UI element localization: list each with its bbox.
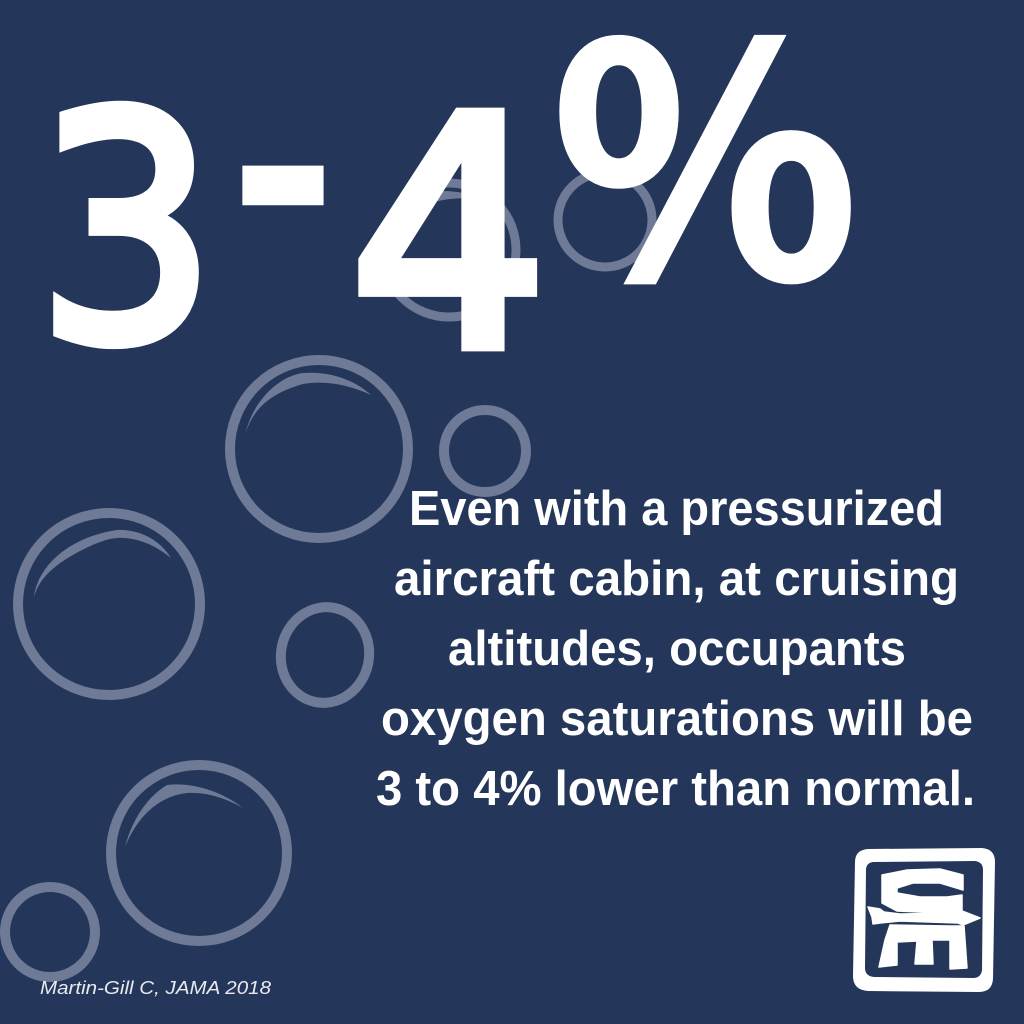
title: 3-4%: 4 — [349, 52, 548, 420]
bubble: large left — [18, 513, 200, 695]
bubble: oval — [272, 599, 378, 711]
title: 3-4%: 3 — [38, 49, 216, 412]
body text — [376, 482, 975, 816]
citation: Martin-Gill C, JAMA 2018 — [40, 978, 271, 998]
bubble: behind the percent sign — [558, 173, 652, 267]
body text: oxygen saturations will be — [381, 692, 973, 746]
bubble: behind the 4 — [382, 183, 516, 317]
bubble: small bottom left — [5, 887, 95, 977]
icon: logo stamp — [853, 848, 995, 992]
body text: altitudes, occupants — [448, 622, 906, 676]
title: 3-4% — [38, 0, 859, 420]
body text: aircraft cabin, at cruising — [394, 552, 959, 606]
bubble: large bottom — [111, 765, 287, 941]
bubble: small centre — [444, 410, 526, 492]
bubbles — [5, 173, 652, 977]
body text: 3 to 4% lower than normal. — [376, 762, 975, 816]
bubble: large centre — [230, 360, 408, 538]
body text: Even with a pressurized — [409, 482, 944, 536]
